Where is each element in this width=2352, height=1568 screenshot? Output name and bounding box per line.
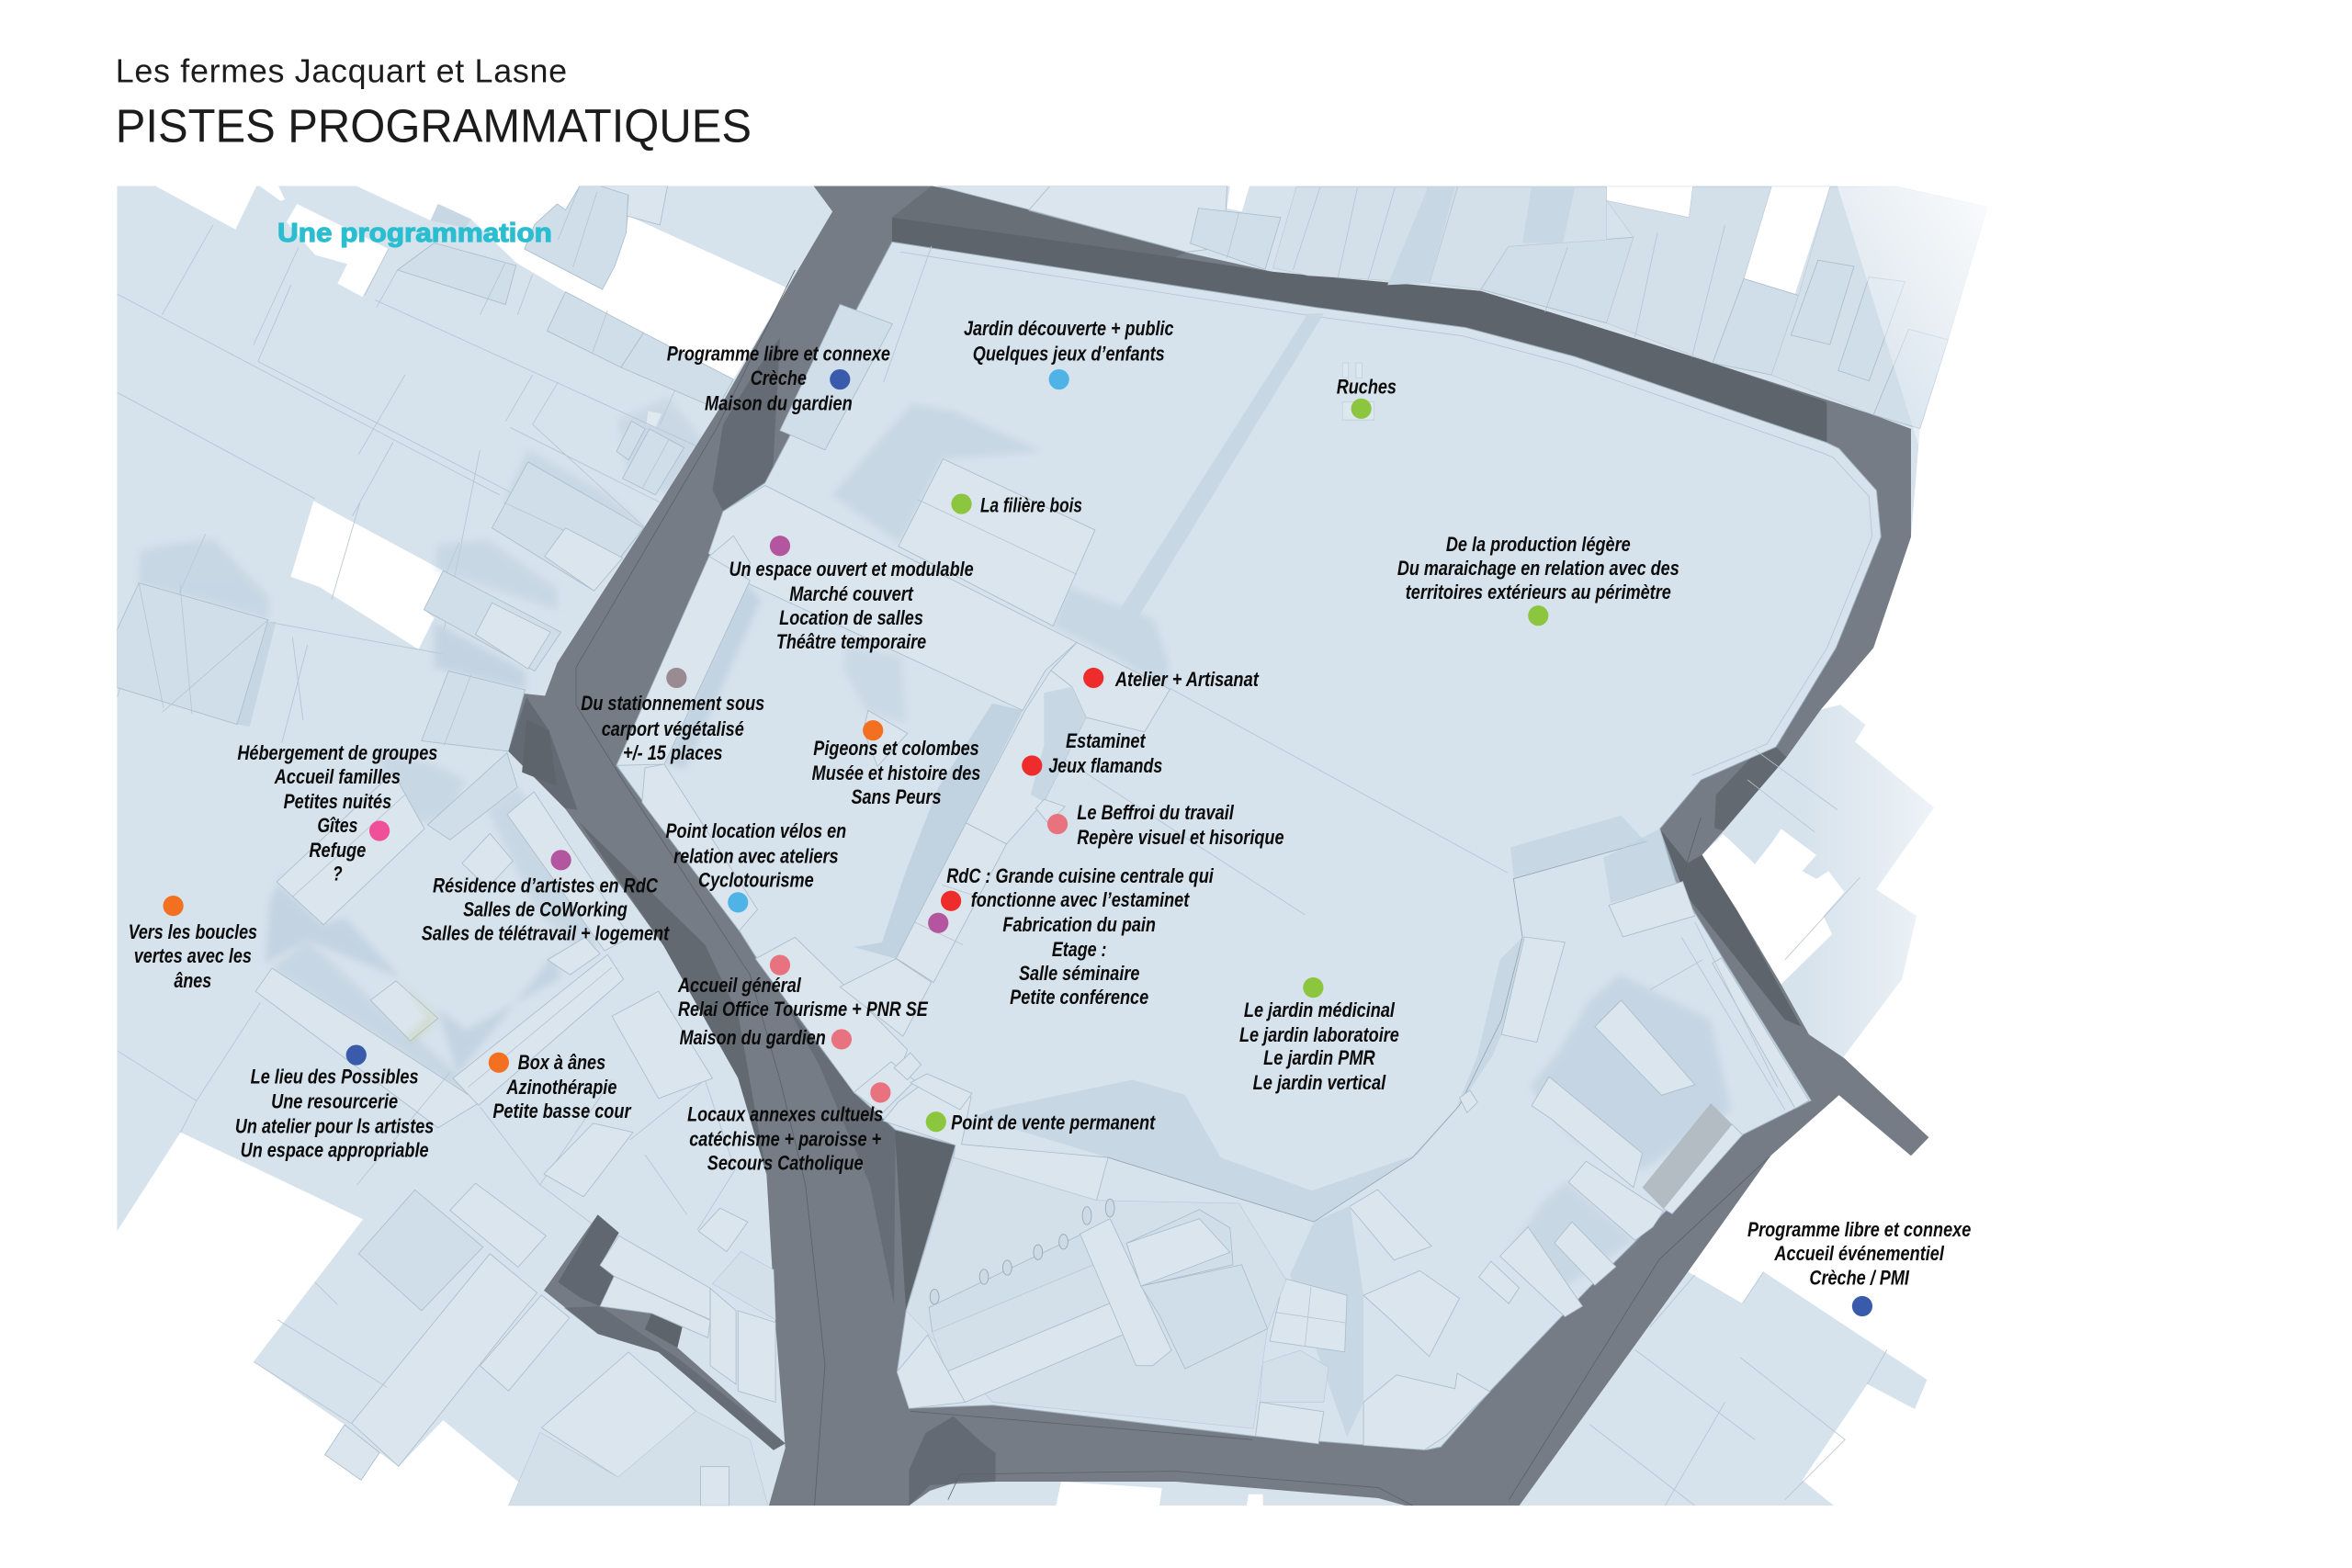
callout: Programme libre, Accueil événementiel, Crèche / PMI: Programme libre et connexe [1747, 1218, 1971, 1241]
callout: Point location vélos [665, 819, 846, 912]
callout: Le lieu des Possibles: Le lieu des Possibles [251, 1066, 419, 1089]
callout: Box à ânes: Box à ânes [518, 1051, 605, 1074]
north building [780, 304, 892, 450]
callout: Programme libre, Crèche, Maison du gardien [667, 343, 890, 415]
lower garden shadows [975, 937, 1522, 1222]
callout: Locaux annexes culturels: catéchisme + paroisse + [689, 1127, 881, 1150]
callout: Hébergement de groupes: Hébergement de groupes [237, 741, 437, 764]
heading: PISTES PROGRAMMATIQUES: PISTES PROGRAMMATIQUES [116, 99, 752, 152]
callout: Le Beffroi du travail: Repère visuel et hisorique [1077, 826, 1284, 849]
callout: Accueil général: Relai Office Tourisme + PNR SE [678, 998, 929, 1021]
callout: Un espace ouvert et modulable: Marché couvert [789, 582, 914, 605]
map ground silhouette [117, 186, 1987, 1506]
callout: Maison du gardien: Maison du gardien [680, 1026, 826, 1049]
callout: Vers les boucles vertes: vertes avec les [134, 944, 252, 967]
callout: Locaux annexes culturels [687, 1082, 890, 1174]
subtitle: Les fermes Jacquart et Lasne: Les fermes Jacquart et Lasne [116, 51, 567, 89]
west quarter: diagonal rows of buildings [117, 186, 733, 925]
callout: Le lieu des Possibles: Un atelier pour ls artistes [235, 1114, 434, 1137]
pigeon house [864, 710, 908, 766]
callout: Le lieu des Possibles: Un espace appropriable [241, 1139, 429, 1162]
farm buildings around the central court [616, 304, 1170, 1201]
callout: Du stationnement: +/- 15 places [623, 741, 723, 764]
callout: Atelier + Artisanat: Atelier + Artisanat [1114, 668, 1260, 691]
callout: Résidence d'artistes [422, 850, 670, 945]
callout: Programme libre, Accueil événementiel, Crèche / PMI: Accueil événementiel [1774, 1242, 1945, 1265]
courtyard shadows [664, 581, 761, 768]
north row of buildings [937, 186, 1985, 429]
side street [544, 1214, 786, 1450]
callout: Atelier + Artisanat [1083, 668, 1260, 691]
callout: Locaux annexes culturels: Locaux annexes cultuels [687, 1102, 883, 1125]
south-west wing [642, 764, 757, 931]
callout: Un espace ouvert et modulable: Location de salles [779, 606, 923, 629]
church and churchyard [897, 1157, 1286, 1428]
callout: Pigeons et colombes: Musée et histoire des [812, 761, 980, 784]
callout: De la production légère: De la production légère [1446, 533, 1631, 556]
callout: RdC Grande cuisine centrale [928, 864, 1214, 1009]
callout: Estaminet, Jeux flamands [1022, 729, 1162, 777]
map: aerial massing model of the site [117, 186, 2010, 1506]
west wing [616, 557, 750, 765]
callout: RdC Grande cuisine centrale: fonctionne avec l’estaminet [971, 888, 1190, 911]
callout: Programme libre, Crèche, Maison du gardien: Programme libre et connexe [667, 343, 890, 366]
beehives [1342, 363, 1374, 420]
callout: Le Beffroi du travail [1047, 801, 1284, 849]
callout: Le jardin médicinal: Le jardin laboratoire [1239, 1023, 1399, 1046]
callout: Ruches: Ruches [1337, 376, 1396, 399]
garden dividing strip [1122, 314, 1323, 614]
callout: Estaminet, Jeux flamands: Estaminet [1066, 729, 1147, 752]
title [116, 51, 752, 152]
callout: Un espace ouvert et modulable: Un espace ouvert et modulable [729, 558, 974, 581]
callout: Un espace ouvert et modulable [729, 536, 974, 653]
garden inner border [900, 252, 1872, 775]
callout: Du stationnement: carport végétalisé [602, 717, 744, 740]
callout: Hébergement de groupes: Accueil familles [274, 765, 401, 788]
atelier wing [1051, 642, 1170, 732]
right side lots [1747, 750, 1860, 960]
callout: Vers les boucles vertes: Vers les boucles [129, 920, 257, 943]
callout: Le jardin médicinal: Le jardin médicinal [1244, 998, 1396, 1021]
callout: Résidence d'artistes: Salles de télétravail + logement [422, 922, 670, 945]
callout: De la production légère: territoires extérieurs au périmètre [1406, 581, 1671, 604]
callout: Du stationnement: Du stationnement sous [581, 692, 764, 715]
callout: Hébergement de groupes: Petites nuités [284, 790, 391, 813]
callout: Accueil général: Accueil général [677, 974, 801, 997]
south east block buildings [1460, 829, 1809, 1316]
callout: Point de vente permanent: Point de vente permanent [951, 1111, 1156, 1134]
callout: Hébergement de groupes [237, 741, 437, 885]
callout: Le lieu des Possibles [235, 1044, 434, 1162]
callout: De la production légère [1397, 533, 1679, 626]
callout: Pigeons et colombes: Pigeons et colombes [813, 737, 979, 760]
callout: Ruches [1337, 376, 1396, 419]
callout: Hébergement de groupes: ? [333, 862, 343, 885]
long band toward the point de vente [883, 1083, 1108, 1201]
callout: Le jardin médicinal: Le jardin vertical [1253, 1071, 1386, 1094]
road network [508, 186, 1928, 1506]
callout: Point location vélos: Cyclotourisme [698, 869, 814, 892]
west quarter parcels lines [117, 225, 705, 1133]
callout: RdC Grande cuisine centrale: Salle séminaire [1019, 962, 1139, 985]
callout: Pigeons et colombes [812, 720, 980, 808]
callout: Box à ânes: Petite basse cour [492, 1100, 632, 1122]
callout: Point location vélos: relation avec ateliers [673, 845, 839, 868]
label: Une programmation: Une programmation [277, 219, 552, 248]
callout: Le Beffroi du travail: Le Beffroi du travail [1077, 801, 1234, 824]
callout: Box à ânes [489, 1051, 632, 1122]
callout: Pigeons et colombes: Sans Peurs [852, 785, 941, 808]
central block: gardens and paving [616, 242, 1881, 1450]
callout: Du stationnement [581, 668, 764, 764]
fade on the right edge buildings [1848, 711, 1934, 1051]
estaminet [966, 671, 1086, 844]
belfry [1036, 799, 1065, 822]
callout: De la production légère: Du maraichage en relation avec des [1397, 557, 1679, 580]
south blocks [755, 937, 908, 1092]
callout: Jardin découverte: Quelques jeux d’enfants [973, 343, 1165, 366]
la filière bois [899, 459, 1095, 626]
callout: Box à ânes: Azinothérapie [506, 1076, 616, 1099]
callout: Jardin découverte: Jardin découverte + public [964, 317, 1174, 340]
west quarter: lodging, residence and courtyard buildings [255, 792, 735, 1242]
callout: Vers les boucles vertes [129, 896, 257, 992]
callout: Point location vélos: Point location vélos en [665, 819, 846, 842]
callout: Résidence d'artistes: Résidence d’artistes en RdC [433, 874, 659, 897]
long east wing [896, 823, 1007, 982]
callout: Jardin découverte [964, 317, 1174, 389]
callout: Estaminet, Jeux flamands: Jeux flamands [1048, 754, 1162, 777]
darker shaded road segments [892, 218, 1826, 443]
callout: Hébergement de groupes: Gîtes [317, 814, 357, 837]
callout: RdC Grande cuisine centrale: Petite conférence [1010, 986, 1148, 1009]
callout: Vers les boucles vertes: ânes [174, 969, 211, 992]
callout: Le jardin médicinal: Le jardin PMR [1263, 1046, 1375, 1069]
white gaps between the buildings [155, 186, 1845, 1506]
callout: RdC Grande cuisine centrale: RdC : Grande cuisine centrale qui [946, 864, 1214, 887]
callout: RdC Grande cuisine centrale: Etage : [1052, 938, 1106, 961]
shadow in north garden [832, 404, 1041, 543]
south houses between church and road [1256, 1190, 1490, 1450]
lower garden outline [1091, 841, 1646, 1222]
callout: Accueil général [677, 954, 929, 1021]
callout: Le lieu des Possibles: Une resourcerie [271, 1090, 398, 1113]
callout: Programme libre, Accueil événementiel, Crèche / PMI: Crèche / PMI [1809, 1266, 1910, 1289]
callout: RdC Grande cuisine centrale: Fabrication du pain [1002, 913, 1156, 936]
callout: Locaux annexes culturels: Secours Catholique [707, 1151, 864, 1174]
callout: Programme libre, Crèche, Maison du gardien: Crèche [751, 367, 807, 389]
callout: Résidence d'artistes: Salles de CoWorking [463, 898, 628, 921]
callout: Programme libre, Crèche, Maison du gardien: Maison du gardien [705, 392, 853, 415]
south west buildings drawn above the side street [254, 991, 775, 1506]
fade on the upper right edge [1838, 186, 2010, 450]
callout: Hébergement de groupes: Refuge [309, 839, 366, 862]
long wing: un espace ouvert [708, 485, 1077, 710]
callout: Le jardin médicinal [1239, 977, 1399, 1094]
callout: La filière bois: La filière bois [980, 494, 1082, 517]
callout: Programme libre, Accueil événementiel, Crèche / PMI [1747, 1218, 1971, 1316]
lower right lots [1590, 1271, 1887, 1506]
callout: La filière bois [951, 493, 1082, 517]
callout: Un espace ouvert et modulable: Théâtre temporaire [776, 630, 926, 653]
